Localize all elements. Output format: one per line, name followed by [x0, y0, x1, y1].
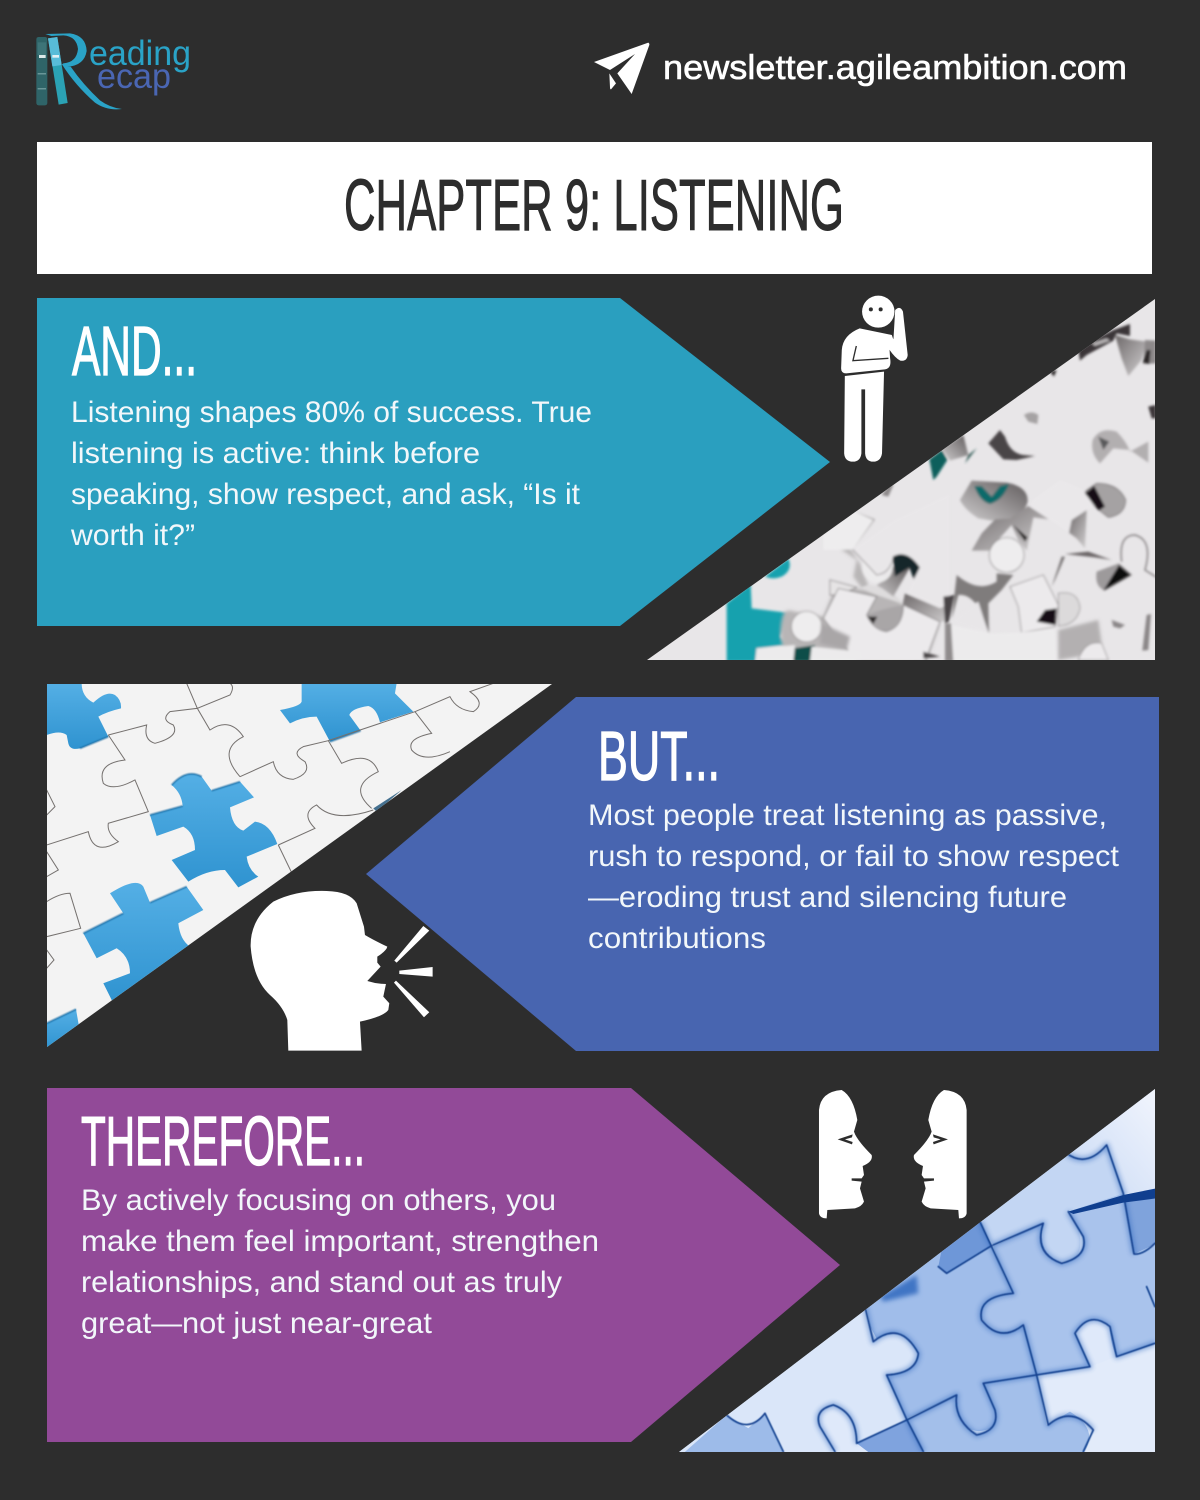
text: eading: eading	[89, 34, 191, 73]
text block: therefore body: By actively focusing on others, you	[81, 1184, 556, 1217]
icon: two faces	[819, 1090, 967, 1218]
icon: paper plane	[594, 43, 649, 94]
lower right part	[943, 480, 1158, 662]
website link	[594, 43, 1127, 94]
icon: letter R	[45, 33, 122, 109]
image: assembled white puzzle with blue gaps	[40, 680, 560, 1050]
icon: thinking person	[841, 296, 908, 462]
title banner	[37, 142, 1152, 274]
upper part	[929, 324, 1156, 480]
heading: BUT: BUT...	[598, 717, 720, 795]
text block: therefore body: make them feel important, strengthen	[81, 1225, 599, 1258]
panel: BUT	[366, 697, 1159, 1051]
text block: therefore body: great—not just near-great	[81, 1307, 433, 1340]
text block: but body: —eroding trust and silencing future	[588, 881, 1067, 914]
heading: THEREFORE: THEREFORE...	[81, 1102, 365, 1180]
text block: and body	[70, 396, 592, 552]
icon: books	[36, 37, 68, 105]
text block: therefore body	[81, 1184, 599, 1340]
title: CHAPTER 9: LISTENING	[344, 166, 844, 246]
image: scattered puzzle pieces	[640, 295, 1160, 665]
panel: AND	[37, 298, 830, 626]
text: url: newsletter.agileambition.com	[663, 49, 1127, 87]
text block: and body: listening is active: think before	[71, 437, 480, 470]
text block: but body: Most people treat listening as passive,	[588, 799, 1107, 832]
text block: but body: contributions	[588, 922, 766, 955]
panel: THEREFORE	[47, 1088, 840, 1442]
icon: speaking head	[251, 891, 433, 1051]
text block: but body	[588, 799, 1120, 955]
logo: Reading Recap	[36, 33, 191, 109]
text block: and body: worth it?”	[70, 519, 195, 552]
heading: AND: AND...	[72, 312, 197, 390]
lower left part	[727, 483, 950, 662]
text block: but body: rush to respond, or fail to show respect	[588, 840, 1120, 873]
text block: therefore body: relationships, and stand out as truly	[81, 1266, 562, 1299]
text block: and body: speaking, show respect, and ask, “Is it	[71, 478, 581, 511]
text block: and body: Listening shapes 80% of success. True	[71, 396, 592, 429]
image: blue puzzle close-up	[670, 1085, 1160, 1455]
text: ecap: ecap	[97, 57, 171, 96]
